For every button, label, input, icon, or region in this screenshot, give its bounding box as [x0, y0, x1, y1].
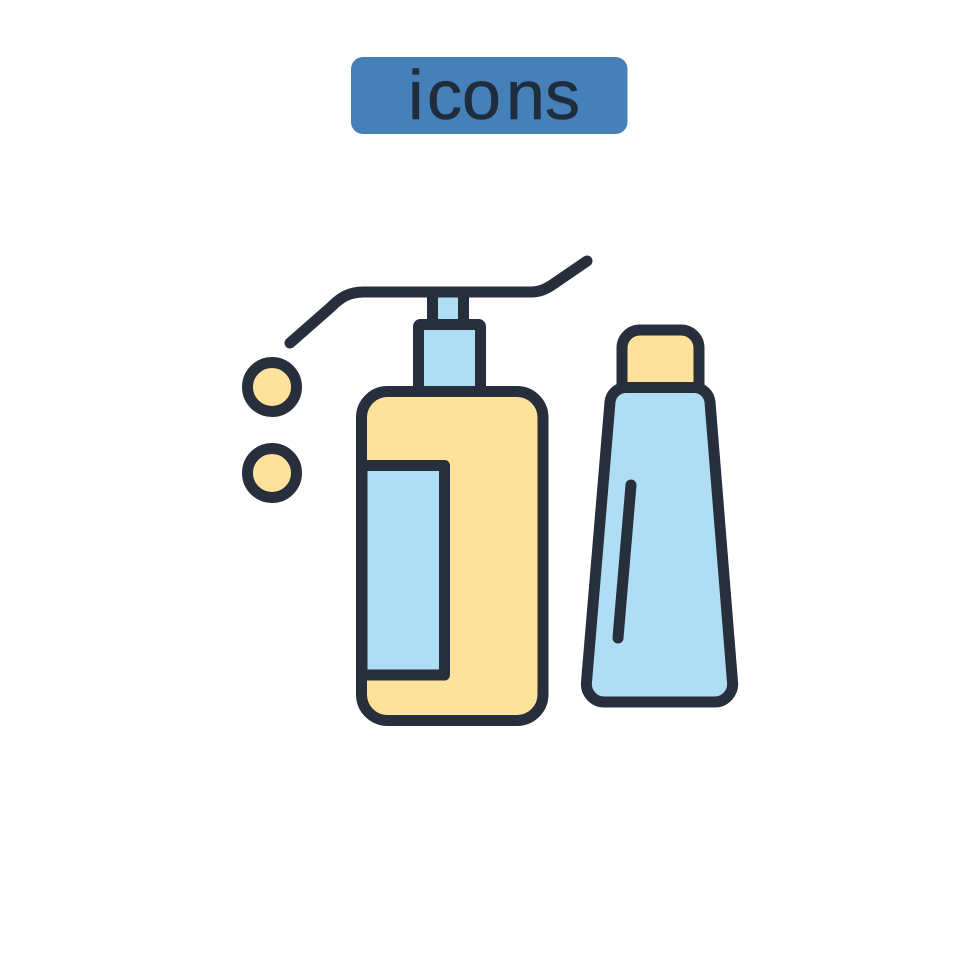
tube cap — [622, 330, 699, 388]
pump stem — [432, 292, 464, 325]
icon: tube bottle — [586, 330, 733, 702]
icon: soap pump bottle — [290, 261, 587, 720]
tube body — [586, 387, 733, 702]
pump nozzle — [290, 261, 587, 343]
title badge: icons — [408, 56, 580, 134]
title badge — [351, 56, 628, 134]
tube highlight — [618, 485, 631, 638]
icon: soap drop lower — [248, 448, 296, 498]
bottle body — [362, 392, 543, 720]
bottle label — [362, 466, 444, 675]
icon: soap drop upper — [248, 362, 296, 412]
pump neck — [418, 324, 480, 392]
